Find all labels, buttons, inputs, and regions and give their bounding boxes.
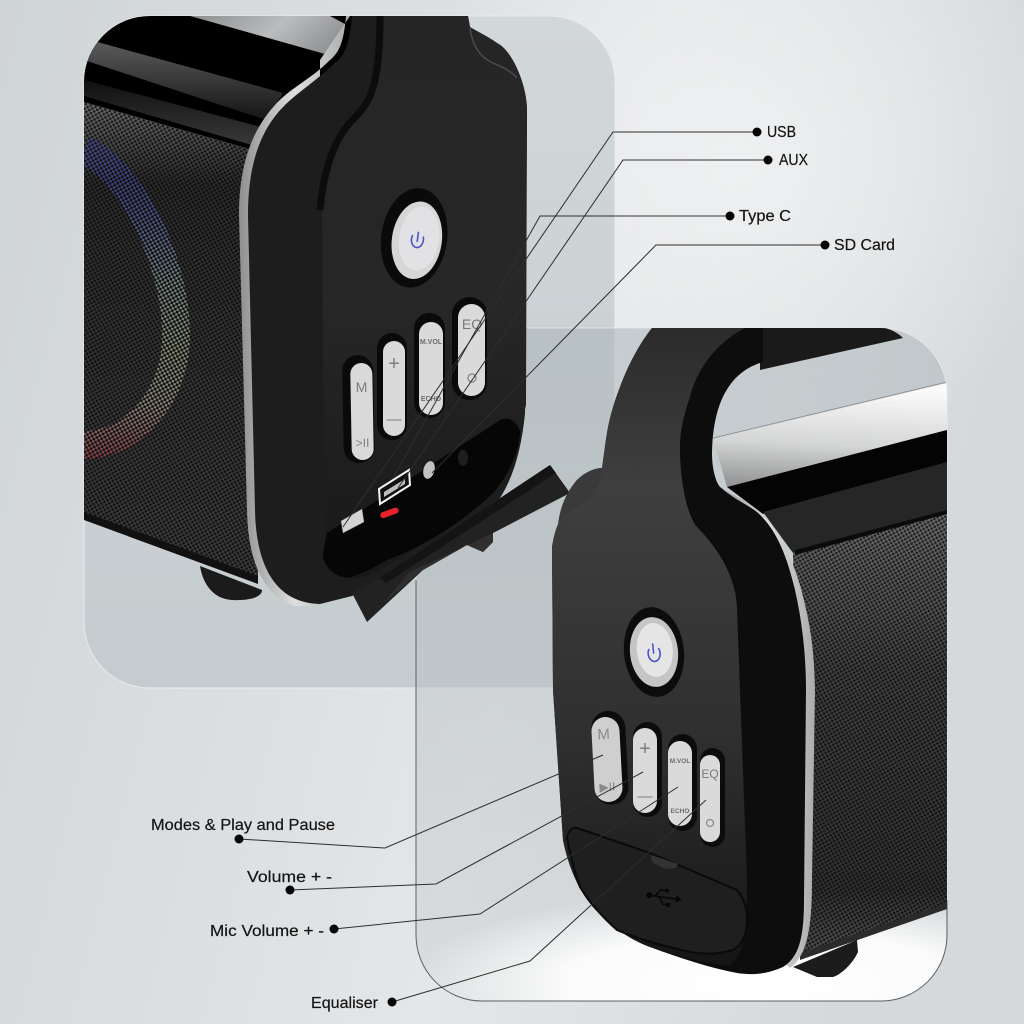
button: plus and minus bbox=[377, 333, 407, 440]
dark body band bbox=[763, 462, 947, 553]
port: USB bbox=[379, 470, 410, 504]
panel: ports backdrop bbox=[84, 16, 615, 688]
callout: Equaliser bbox=[311, 800, 706, 1012]
button: EQ and light: EQ bbox=[701, 767, 719, 781]
button: mic volume and echo: ECHO bbox=[671, 808, 689, 815]
callout: Volume: Volume + - bbox=[247, 869, 332, 886]
left shoulder highlight bbox=[558, 468, 602, 525]
button: mic volume and echo: M.VOL bbox=[670, 758, 690, 765]
button: M and play: M bbox=[356, 379, 368, 395]
button: plus and minus: + bbox=[388, 353, 400, 375]
port: AUX bbox=[421, 460, 437, 480]
callout: AUX: AUX bbox=[779, 152, 809, 169]
speaker: ports view bbox=[84, 16, 570, 622]
inner face bbox=[322, 16, 527, 409]
power icon bbox=[647, 643, 661, 662]
button: EQ and light: EQ bbox=[462, 316, 482, 332]
silver rim bbox=[239, 16, 350, 606]
callout: Modes and Play and Pause: Modes & Play and Pause bbox=[151, 817, 335, 834]
speaker: controls view bbox=[552, 328, 947, 977]
speaker body rear with grille bbox=[84, 16, 354, 606]
port recess bbox=[323, 419, 520, 578]
outer shell bbox=[552, 328, 806, 974]
button: M and play bbox=[342, 355, 375, 463]
button: plus and minus: + bbox=[639, 738, 651, 760]
callout: AUX bbox=[398, 152, 809, 488]
button: mic volume and echo bbox=[668, 734, 697, 831]
callout: Mic Volume: Mic Volume + - bbox=[210, 923, 324, 940]
RGB light ring bbox=[84, 150, 176, 445]
button: plus and minus bbox=[633, 722, 662, 817]
power button bbox=[624, 607, 684, 697]
button: M and play: ▶II bbox=[599, 780, 616, 794]
port: card slot bbox=[341, 509, 364, 533]
side plate bbox=[248, 16, 527, 604]
button: mic volume and echo: M.VOL bbox=[420, 339, 443, 346]
black body band bbox=[727, 430, 947, 514]
callout: Type C: Type C bbox=[739, 208, 791, 225]
port: red indicator bbox=[380, 507, 399, 519]
callout: Type C bbox=[393, 208, 791, 478]
button: plus and minus: — bbox=[638, 788, 652, 805]
button: M and play: >II bbox=[356, 436, 370, 450]
callout: SD Card bbox=[432, 237, 895, 473]
top handle bar bbox=[760, 328, 903, 370]
button: M and play bbox=[590, 710, 629, 806]
callout: USB bbox=[343, 124, 796, 527]
button: plus and minus: — bbox=[386, 411, 402, 428]
cover hinge bbox=[651, 855, 678, 869]
silver rim bbox=[720, 487, 815, 968]
silver bar bbox=[713, 383, 947, 487]
USB port cover bbox=[567, 828, 747, 954]
callout: Volume bbox=[247, 772, 643, 894]
button: EQ and light bbox=[452, 297, 487, 400]
panel: controls backdrop bbox=[416, 328, 947, 1001]
rubber foot bbox=[200, 566, 262, 600]
button: mic volume and echo bbox=[414, 313, 445, 418]
button: mic volume and echo: ECHO bbox=[421, 396, 442, 403]
open port flap bbox=[352, 465, 570, 622]
face groove bbox=[320, 16, 380, 210]
callout: Equaliser: Equaliser bbox=[311, 995, 378, 1012]
icon: USB symbol bbox=[646, 888, 682, 907]
button: EQ and light bbox=[700, 748, 725, 847]
power button bbox=[375, 184, 454, 292]
callout: Modes and Play and Pause bbox=[151, 755, 603, 848]
rubber foot bbox=[793, 940, 858, 977]
callout: Mic Volume bbox=[210, 787, 678, 940]
top shoulder highlight bbox=[470, 28, 517, 78]
button: M and play: M bbox=[597, 726, 610, 743]
callout: SD Card: SD Card bbox=[834, 237, 895, 254]
power icon bbox=[410, 232, 424, 248]
grille bbox=[793, 512, 947, 957]
callout: USB: USB bbox=[767, 124, 796, 141]
inner face bbox=[552, 328, 747, 965]
